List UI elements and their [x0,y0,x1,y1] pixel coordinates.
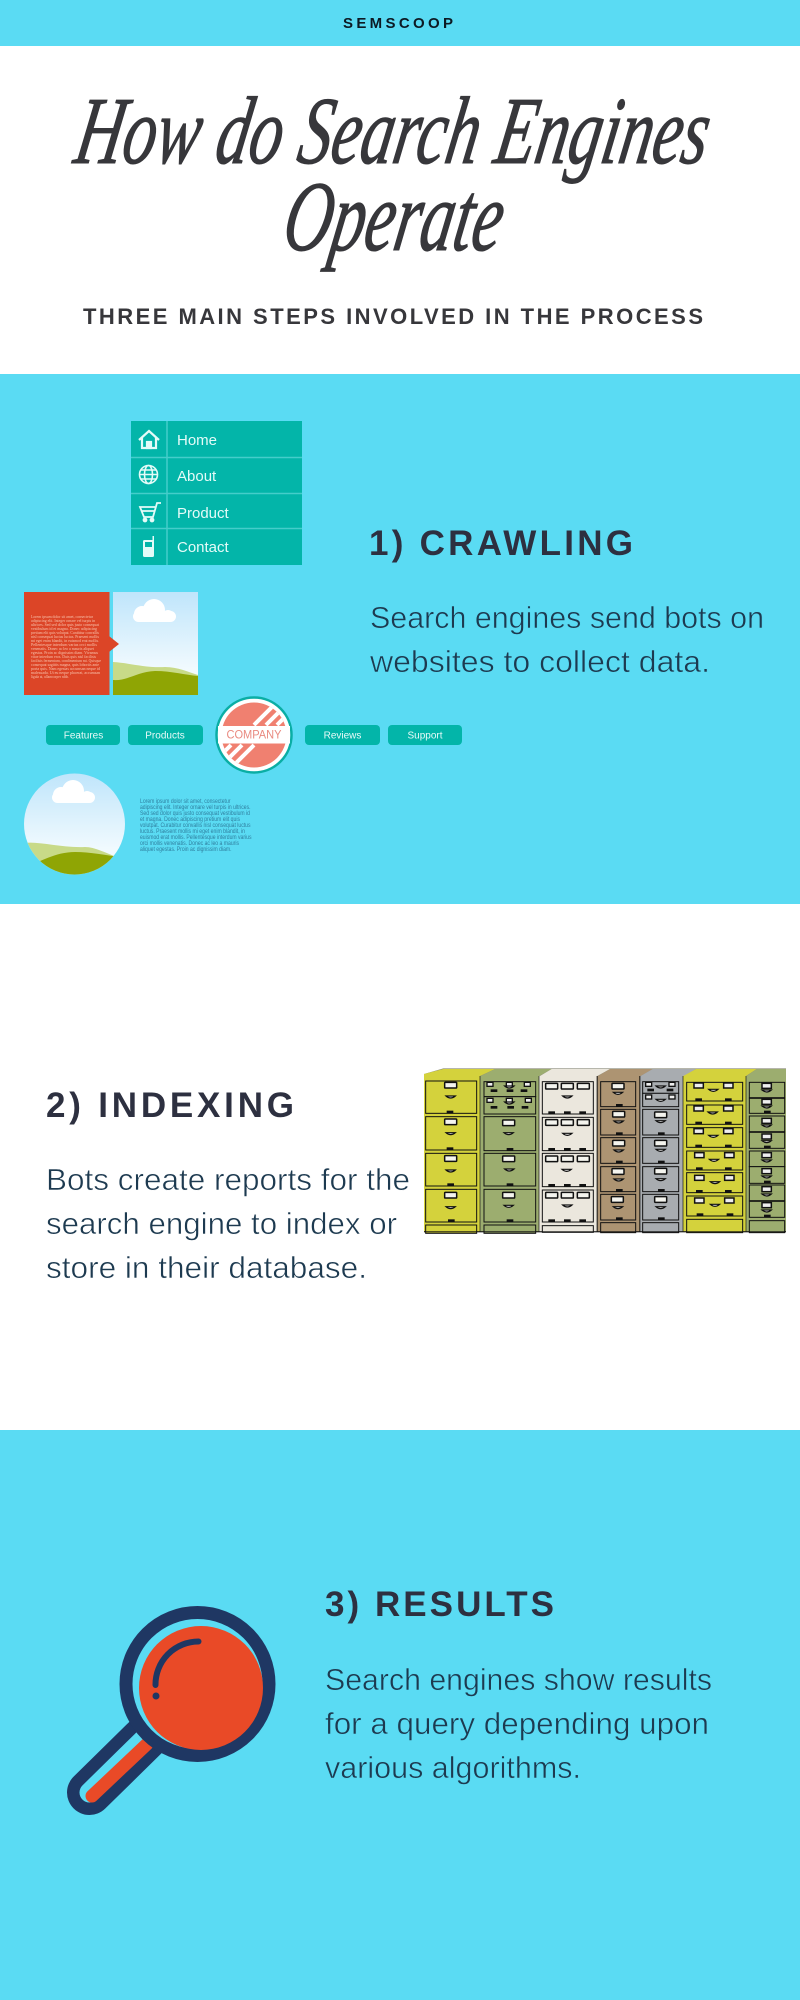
icon: globe [140,466,158,484]
header panel [0,46,800,374]
text: results description [325,1662,712,1785]
title: Operate [276,161,514,272]
icon: magnifying glass [90,1612,269,1796]
cabinet column 5 [640,1069,696,1233]
heading: results: 3) RESULTS [325,1585,554,1624]
menu labels: Contact [177,539,230,556]
card lorem text: vestibulum id et magna. Donec adipiscing [31,626,98,631]
text: results description: for a query depending upon [325,1706,709,1741]
vertical menu [131,421,302,565]
company logo [215,696,293,774]
text: indexing description [46,1162,410,1285]
brand name: SEMSCOOP [343,15,453,32]
lorem text block: aliquet egestas. Proin ac dignissim diam. [140,847,232,853]
subtitle: THREE MAIN STEPS INVOLVED IN THE PROCESS [83,304,703,329]
card lorem text: ultrices. Sed sed dolor quis justo consequat [31,622,100,627]
horizontal nav buttons [46,725,462,745]
text: indexing description: store in their database. [46,1250,367,1285]
icon: cart [140,503,161,522]
card lorem text: ligula at, ullamcorper nibh. [31,674,69,680]
panel: results [0,1430,800,2000]
card lorem text: consequat sagittis magna, quis lobortis ante [31,662,99,668]
card lorem text: adipiscing elit. Integer ornare vel turpis in [31,618,96,623]
heading: indexing: 2) INDEXING [46,1086,294,1125]
cabinet column 1 [424,1069,495,1233]
text: crawling description: websites to collect data. [369,644,710,679]
lorem text block: adipiscing elit. Integer ornare vel turpis in ultrices. [140,805,251,811]
lorem text block: Sed sed dolor quis justo consequat vestibulum id [140,811,250,817]
lorem text block: euismod erat mollis. Pellentesque interdum varius [140,835,252,841]
lorem text block [140,799,252,853]
icon: home [139,431,159,448]
card lorem text: porta quis. Nam egestas accumsan neque id [31,666,101,671]
illustration: filing cabinets [424,1068,786,1233]
title [67,78,719,272]
heading: crawling: 1) CRAWLING [369,524,633,563]
menu labels: Product [177,505,230,522]
menu labels: About [177,468,217,485]
panel: crawling [0,374,800,904]
text: results description: various algorithms. [325,1750,581,1785]
lorem text block: luctus. Praesent mollis mi eget enim blandit, in [140,829,245,835]
card lorem text [31,614,101,680]
landscape image: circle [24,773,125,875]
menu labels [177,432,230,556]
card lorem text: mi eget enim blandit, in euismod erat mollis. [31,638,99,644]
card lorem text: pretium elit quis volutpat. Curabitur convallis [31,630,99,635]
text: indexing description: search engine to index or [46,1206,397,1241]
card lorem text: vitae interdum eros. Duis quis nisl facilisis [31,654,96,659]
card lorem text: facilisis fermentum, condimentum mi. Quisque [31,658,101,664]
lorem text block: et magna. Donec adipiscing pretium elit quis [140,817,240,823]
top bar [0,0,800,46]
company logo: COMPANY [226,728,282,742]
text: crawling description: Search engines send bots on [370,600,764,635]
cabinet column 2 [480,1069,552,1233]
horizontal nav buttons: Features [64,730,103,742]
lorem text block: Lorem ipsum dolor sit amet, consectetur [140,799,230,805]
icon: phone [143,536,154,557]
cabinet column 4 [598,1069,653,1233]
card lorem text: venenatis. Donec ac leo a mauris aliquet [31,646,95,651]
menu labels: Home [177,432,217,449]
card lorem text: Lorem ipsum dolor sit amet, consectetur [31,614,93,620]
red text card [24,592,119,695]
cabinet column 3 [539,1069,610,1232]
panel: indexing [0,904,800,1430]
card lorem text: malesuada. Ut eu neque placerat, accumsan [31,670,101,676]
horizontal nav buttons: Reviews [324,730,361,742]
text: indexing description: Bots create reports for the [46,1162,410,1197]
horizontal nav buttons: Support [407,730,443,742]
card lorem text: nisl consequat luctus luctus. Praesent mollis [31,634,99,639]
landscape image: square [113,592,198,695]
lorem text block: orci mollis venenatis. Donec ac leo a mauris [140,841,239,847]
card lorem text: egestas. Proin ac dignissim diam. Vivamus [31,650,98,655]
text: results description: Search engines show results [325,1662,712,1697]
lorem text block: volutpat. Curabitur convallis nisl consequat luctus [140,823,250,829]
cabinet column 6 [683,1069,757,1233]
text: crawling description [369,600,764,679]
horizontal nav buttons: Products [145,730,185,742]
card lorem text: Pellentesque interdum varius orci mollis [31,642,97,647]
cabinet column 7 [746,1069,786,1233]
